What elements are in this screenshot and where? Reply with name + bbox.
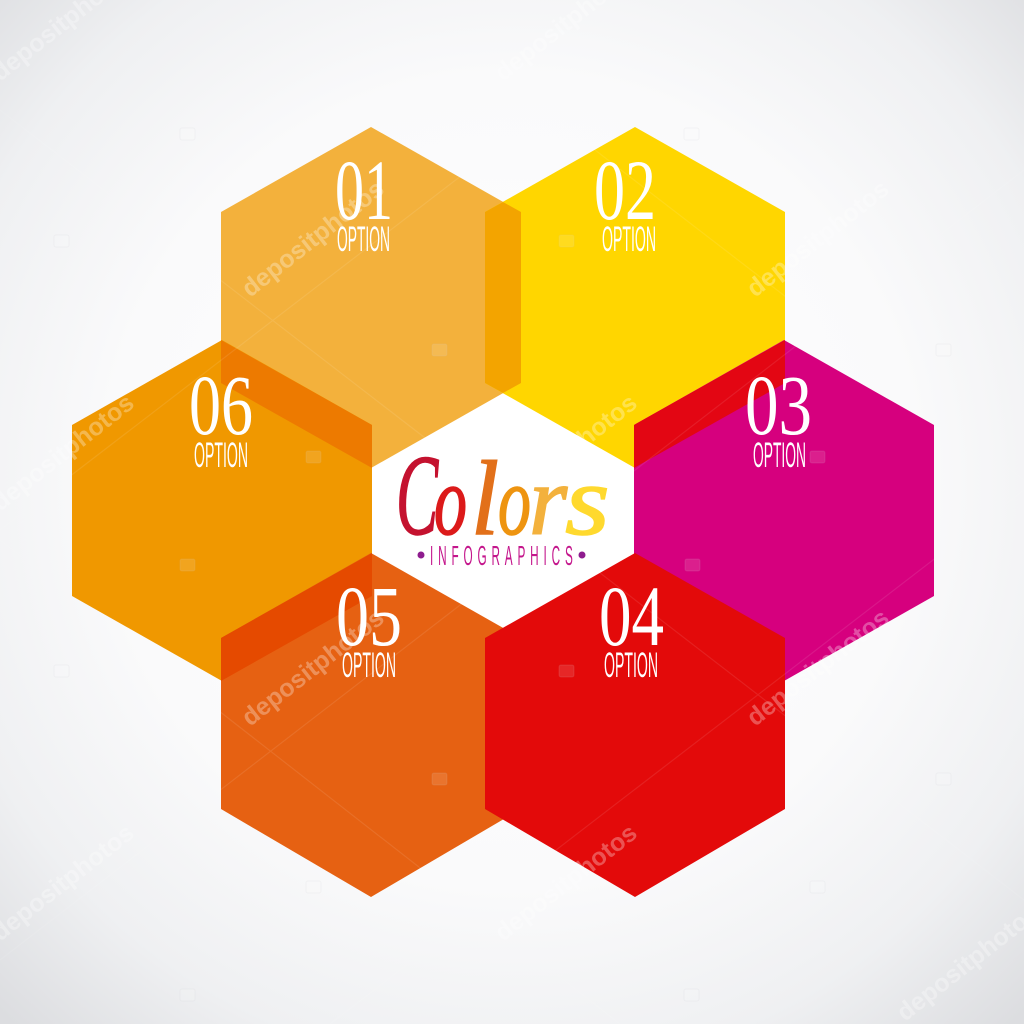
overlap 03 and 02 — [634, 340, 785, 468]
title: Colors — [396, 432, 610, 560]
number 01: 01 — [335, 142, 393, 238]
watermarks: depositphotos — [489, 389, 642, 517]
text: OPTION — [753, 436, 806, 475]
title: Colors: r — [529, 446, 568, 556]
label 06 — [189, 357, 253, 475]
watermark camera marks — [54, 128, 951, 1001]
watermarks: depositphotos — [489, 819, 642, 947]
title: Colors: s — [565, 446, 610, 556]
label 04 — [599, 568, 664, 685]
central title — [396, 432, 610, 572]
text: OPTION — [604, 646, 658, 685]
watermarks: depositphotos — [741, 604, 894, 732]
text: OPTION — [194, 436, 248, 475]
watermarks: depositphotos — [741, 175, 894, 303]
hexagon 04 — [485, 553, 785, 897]
label 02 — [594, 142, 656, 259]
number 06: 06 — [189, 357, 253, 453]
hexagon 05 — [221, 553, 521, 897]
hexagon 03 — [634, 340, 934, 681]
title: Colors: C — [396, 432, 439, 560]
text: OPTION — [602, 220, 656, 259]
watermarks: depositphotos — [236, 604, 389, 732]
text: OPTION — [342, 646, 396, 685]
hexagon 02 — [485, 127, 785, 468]
text: OPTION — [337, 220, 390, 259]
hexagon 01 — [221, 127, 521, 468]
overlap 05 and 06 — [221, 553, 372, 681]
subtitle: INFOGRAPHICS with dots: INFOGRAPHICS — [430, 540, 573, 572]
number 04: 04 — [599, 568, 664, 664]
watermarks: depositphotos — [236, 175, 389, 303]
hexagon 06 — [72, 340, 372, 681]
title: Colors: o — [498, 447, 531, 556]
title: Colors: o — [434, 447, 467, 556]
label 05 — [336, 568, 402, 685]
central white hexagon — [372, 393, 635, 628]
number 02: 02 — [594, 142, 656, 238]
number 05: 05 — [336, 568, 402, 664]
label 03 — [745, 357, 812, 475]
overlap 06 and 01 — [221, 340, 372, 468]
label 01 — [335, 142, 393, 259]
number 03: 03 — [745, 357, 812, 453]
overlap 01 and 02 — [485, 202, 521, 393]
title: Colors: l — [471, 441, 499, 558]
